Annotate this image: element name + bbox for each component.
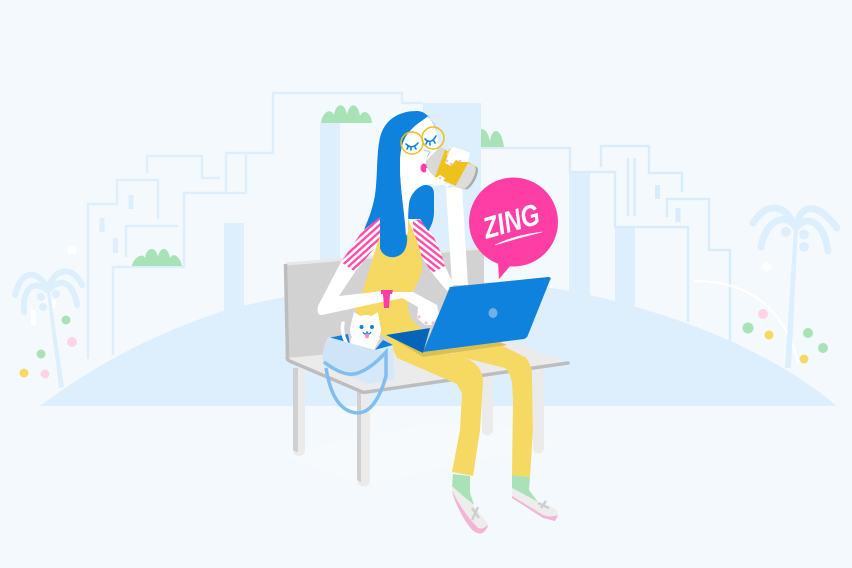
palm tree left (15, 271, 82, 388)
dress (355, 218, 430, 345)
legs (387, 337, 533, 477)
hill (40, 281, 837, 406)
hair behind neck (408, 185, 434, 231)
bushes (132, 105, 504, 266)
hand on cup (433, 147, 470, 184)
shoes (452, 486, 558, 534)
finger nails (418, 316, 434, 324)
buildings left (88, 93, 423, 359)
speech bubble (469, 178, 558, 279)
bench (286, 248, 569, 486)
neck to cup (426, 168, 450, 188)
face and neck (400, 117, 439, 236)
glasses (401, 127, 444, 154)
laptop shadow on legs (395, 340, 507, 357)
sleeves and upper arm (341, 217, 454, 291)
dots and sparkles (20, 246, 828, 378)
floor shadow (280, 425, 558, 485)
buildings right (481, 146, 730, 354)
left arm (318, 262, 439, 325)
closed eyes (406, 136, 436, 157)
filled towers (224, 103, 635, 313)
white curve (695, 281, 798, 362)
raised arm (446, 186, 468, 285)
laptop (386, 277, 551, 353)
coffee cup (426, 147, 481, 191)
watch (381, 290, 393, 308)
speech bubble: ZING (478, 197, 543, 246)
socks (452, 474, 538, 505)
tote bag (323, 312, 395, 413)
palm tree right (753, 208, 837, 368)
cat (342, 312, 381, 350)
mouth (420, 164, 428, 172)
hair (364, 111, 437, 257)
